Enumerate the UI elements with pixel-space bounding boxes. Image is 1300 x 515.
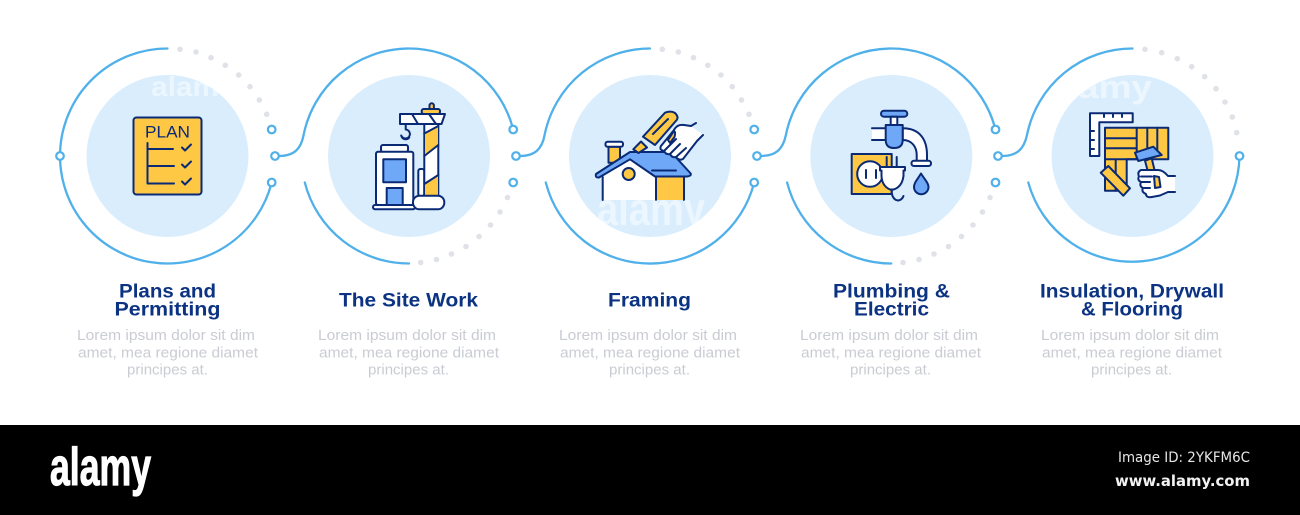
icon: plan checklist bbox=[134, 118, 202, 194]
ring: step 2 bbox=[271, 49, 517, 265]
text block: step 2: amet, mea regione diamet bbox=[319, 345, 499, 361]
text block: step 3: amet, mea regione diamet bbox=[560, 345, 740, 361]
logo: alamy: alamy bbox=[50, 438, 151, 497]
panel: step 3 framing bbox=[512, 46, 758, 378]
text block: step 3: principes at. bbox=[609, 362, 690, 378]
heading: step 4: Electric bbox=[854, 300, 929, 321]
panel: step 4 plumbing and electric bbox=[753, 49, 999, 378]
ring: step 1 bbox=[56, 46, 276, 264]
heading: step 3: Framing bbox=[608, 290, 691, 312]
image id: Image ID: 2YKFM6C bbox=[1118, 450, 1250, 466]
text block: step 1: amet, mea regione diamet bbox=[78, 345, 258, 361]
panel: step 2 the site work bbox=[271, 49, 517, 378]
text block: step 1: Lorem ipsum dolor sit dim bbox=[77, 328, 255, 344]
heading: step 4 bbox=[833, 282, 950, 321]
text block: step 4 bbox=[800, 328, 981, 378]
background disc: step 4 bbox=[810, 75, 972, 237]
background disc: step 1 bbox=[86, 75, 248, 237]
watermark fragment: step 1: alam bbox=[151, 71, 219, 102]
heading: step 5: Insulation, Drywall bbox=[1040, 282, 1224, 303]
icon: crane and building bbox=[373, 103, 445, 209]
icon: faucet, socket and plug bbox=[852, 111, 931, 200]
background disc: step 3 bbox=[569, 75, 731, 237]
heading: step 1: Permitting bbox=[114, 300, 220, 321]
heading: step 4: Plumbing & bbox=[833, 282, 950, 303]
text block: step 5: Lorem ipsum dolor sit dim bbox=[1041, 328, 1219, 344]
heading: step 5 bbox=[1040, 282, 1224, 321]
heading: step 1: Plans and bbox=[119, 282, 216, 303]
text block: step 5: principes at. bbox=[1091, 362, 1172, 378]
text block: step 5: amet, mea regione diamet bbox=[1042, 345, 1222, 361]
background disc: step 5 bbox=[1052, 75, 1214, 237]
text block: step 2 bbox=[318, 328, 499, 378]
heading: step 2: The Site Work bbox=[339, 290, 478, 312]
ring: step 3 bbox=[512, 46, 758, 264]
panel: step 1 plans and permitting bbox=[56, 46, 276, 378]
icon: house roof with caulk gun and hand bbox=[596, 112, 703, 200]
text block: step 3 bbox=[559, 328, 740, 378]
background disc: step 2 bbox=[328, 75, 490, 237]
footer band bbox=[0, 425, 1300, 515]
icon: flooring, square and hammer in hand bbox=[1090, 113, 1175, 197]
heading: step 1 bbox=[114, 282, 220, 321]
text block: step 4: principes at. bbox=[850, 362, 931, 378]
panel: step 5 insulation drywall flooring bbox=[994, 46, 1243, 378]
ring: step 5 bbox=[994, 46, 1243, 262]
text block: step 2: principes at. bbox=[368, 362, 449, 378]
text block: step 1: principes at. bbox=[127, 362, 208, 378]
text block: step 5 bbox=[1041, 328, 1222, 378]
text block: step 3: Lorem ipsum dolor sit dim bbox=[559, 328, 737, 344]
ring: step 4 bbox=[753, 49, 999, 265]
text block: step 1 bbox=[77, 328, 258, 378]
text block: step 4: amet, mea regione diamet bbox=[801, 345, 981, 361]
website: www.alamy.com bbox=[1115, 472, 1250, 490]
watermark fragment: step 5: amy bbox=[1078, 69, 1152, 105]
heading: step 5: & Flooring bbox=[1081, 300, 1183, 321]
text block: step 4: Lorem ipsum dolor sit dim bbox=[800, 328, 978, 344]
icon: plan checklist: PLAN bbox=[145, 123, 190, 141]
watermark fragment: step 3: alamy bbox=[597, 183, 705, 235]
text block: step 2: Lorem ipsum dolor sit dim bbox=[318, 328, 496, 344]
